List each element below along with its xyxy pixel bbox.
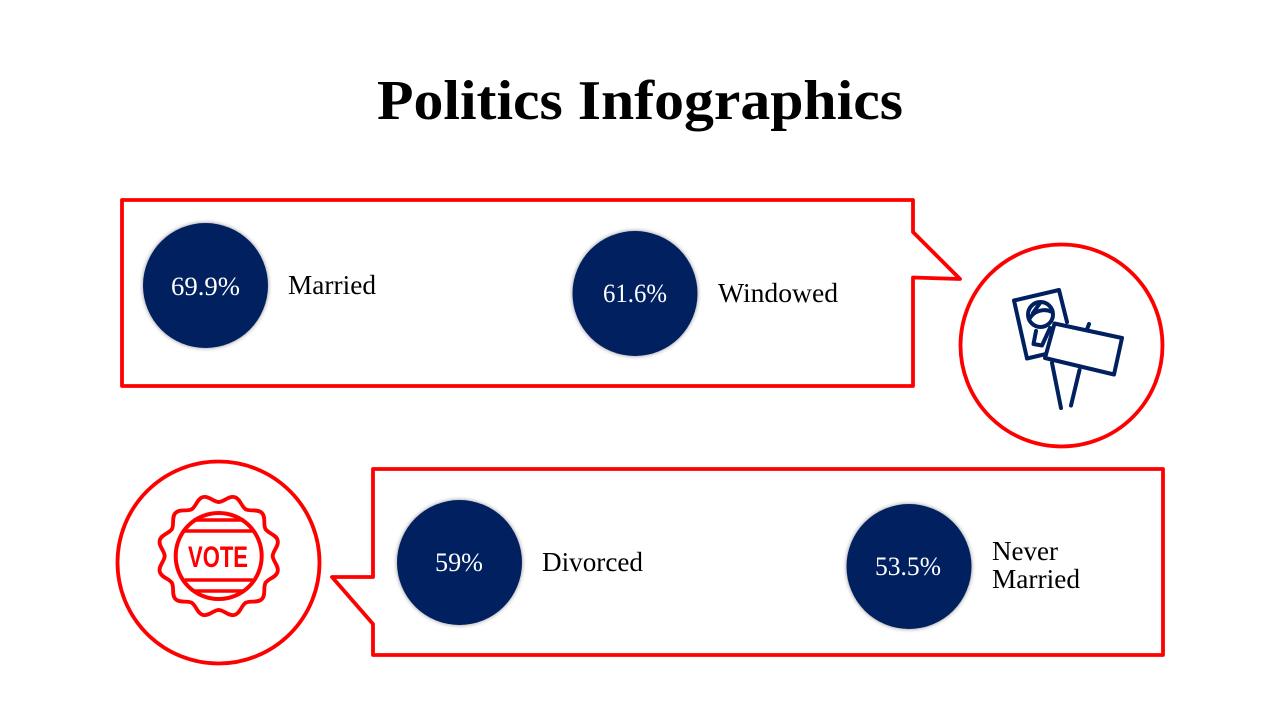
stat: never married <box>846 504 1080 629</box>
icon: campaign signs in circle <box>960 244 1162 446</box>
icon: vote badge in circle: VOTE <box>188 541 248 574</box>
stat: windowed <box>572 231 839 356</box>
callout outline: bottom <box>332 469 1163 655</box>
icon: vote badge in circle <box>118 462 320 664</box>
stat: divorced: 59% <box>435 548 483 577</box>
stat: married <box>143 223 376 348</box>
panel: top callout <box>122 200 960 386</box>
stat: windowed: Windowed <box>718 278 839 308</box>
stat: never married: 53.5% <box>875 552 941 581</box>
callout outline: top <box>122 200 960 386</box>
stat: married: 69.9% <box>171 272 240 301</box>
stat: never married: Married <box>992 564 1080 594</box>
panel: bottom callout <box>332 469 1163 655</box>
title: Politics Infographics <box>377 70 903 132</box>
stat: divorced: Divorced <box>542 547 643 577</box>
stat: divorced <box>397 500 643 625</box>
stat: married: Married <box>288 270 376 300</box>
stat: windowed: 61.6% <box>603 279 667 308</box>
stat: never married: Never <box>992 536 1058 566</box>
